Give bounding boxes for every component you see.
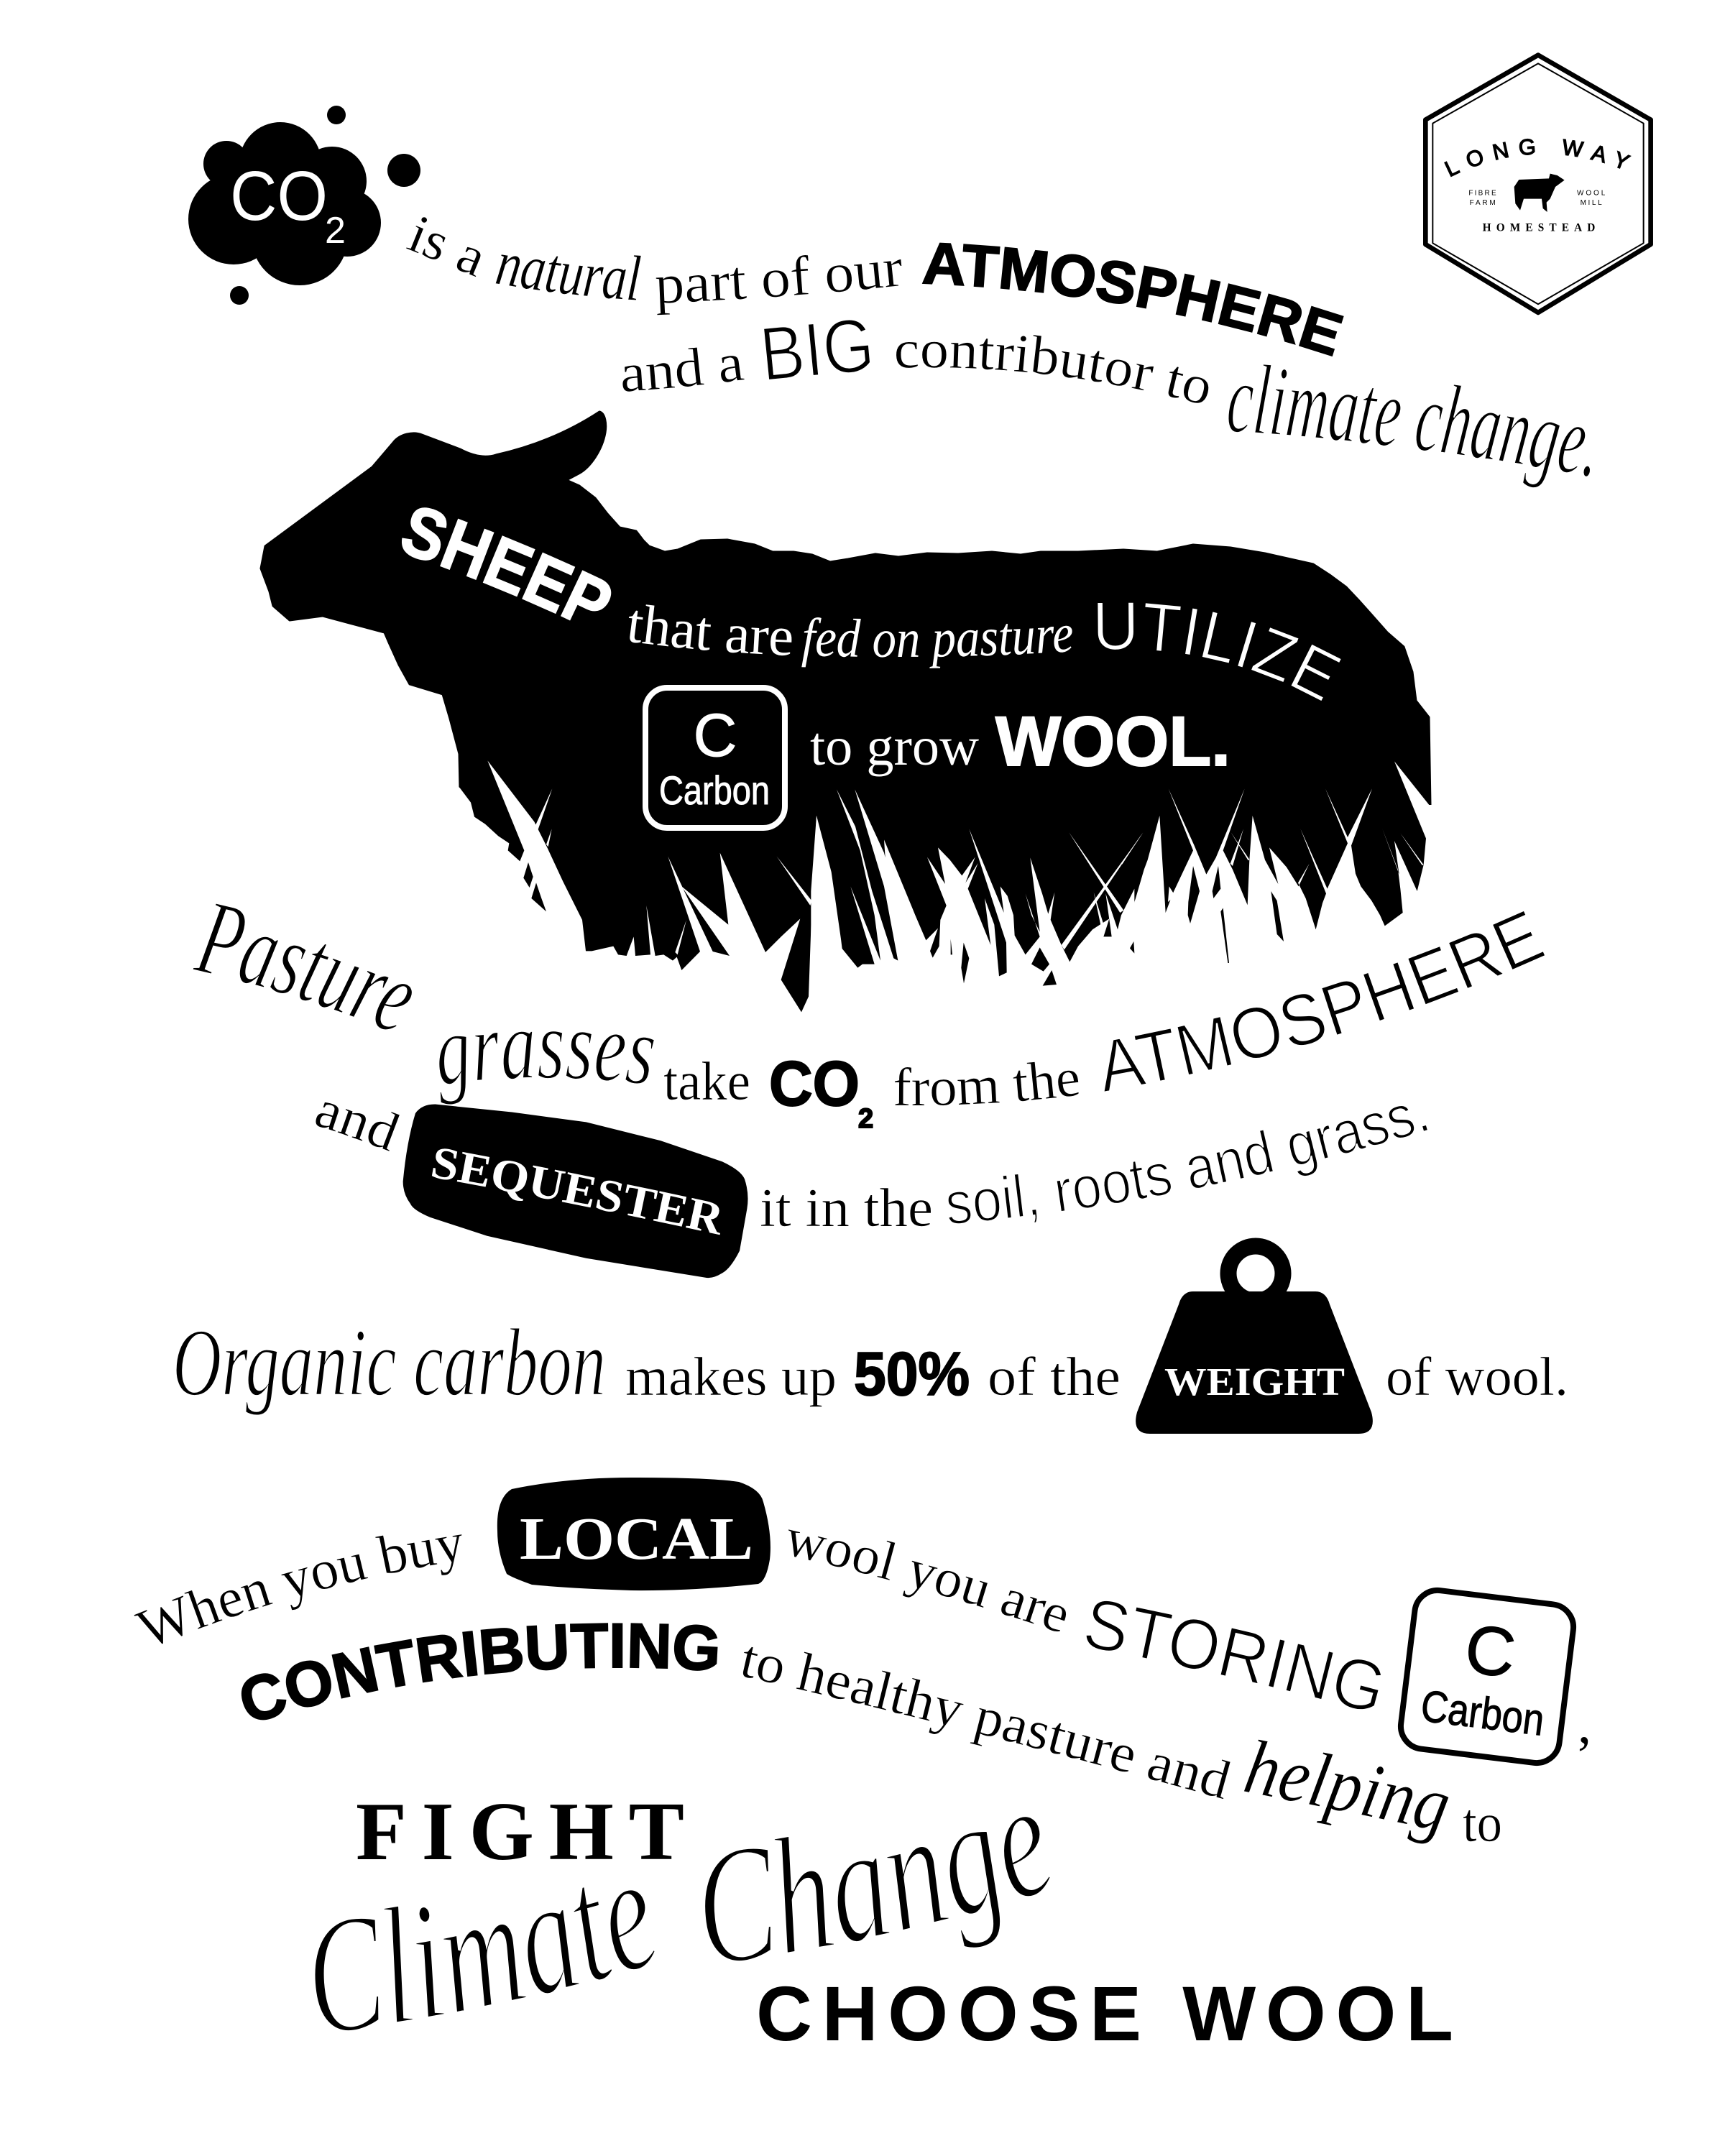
logo: Long Way Homestead hexagon: LONG WAY bbox=[1444, 138, 1632, 177]
line: when you buy local wool you are storing carbon: wool you are bbox=[788, 1529, 1067, 1631]
line: pasture grasses take CO2 from the atmosphere: Pasture bbox=[193, 904, 412, 1029]
heading: fight climate change choose wool bbox=[294, 1743, 1453, 2072]
line: and sequester it in the soil, roots and grass bbox=[308, 1077, 1437, 1278]
line: contributing to healthy pasture and helping to: to healthy pasture and bbox=[743, 1646, 1230, 1800]
badge: local bbox=[497, 1478, 770, 1590]
line: CO2 is a natural part of our atmosphere: natural bbox=[496, 254, 641, 300]
line: and a big contributor to climate change: contributor to bbox=[896, 335, 1209, 403]
icon: CO2 cloud: 2 bbox=[325, 210, 346, 252]
line: CO2 is a natural part of our atmosphere: ATMOSPHERE bbox=[921, 243, 1344, 356]
line: organic carbon makes up 50% of the weight of wool bbox=[172, 1246, 1568, 1434]
icon: weight: WEIGHT bbox=[1164, 1360, 1345, 1404]
line: sheep that are fed on pasture utilize: that are bbox=[628, 604, 792, 655]
grass blades right bbox=[1121, 761, 1432, 1044]
badge: sequester bbox=[403, 1105, 748, 1278]
logo: Long Way Homestead hexagon: HOMESTEAD bbox=[1483, 222, 1595, 234]
icon: CO2 cloud: CO bbox=[230, 157, 328, 235]
logo: Long Way Homestead hexagon: FIBRE bbox=[1468, 190, 1496, 198]
heading: fight climate change choose wool: FIGHT bbox=[356, 1786, 684, 1878]
carbon element box in sheep: Carbon bbox=[659, 768, 770, 813]
heading: fight climate change choose wool: CHOOSE WOOL bbox=[756, 1970, 1453, 2057]
line: pasture grasses take CO2 from the atmosphere: from the bbox=[894, 1061, 1079, 1105]
line: and sequester it in the soil, roots and grass: soil, roots and grass. bbox=[949, 1106, 1427, 1223]
line: organic carbon makes up 50% of the weight of wool: 50% bbox=[854, 1340, 970, 1409]
line: organic carbon makes up 50% of the weight of wool: Organic carbon bbox=[172, 1309, 606, 1416]
line: pasture grasses take CO2 from the atmosphere bbox=[193, 904, 1545, 1134]
line: pasture grasses take CO2 from the atmosphere: ATMOSPHERE bbox=[1104, 911, 1545, 1092]
illustration: sheep silhouette with grass bbox=[261, 412, 1432, 1059]
icon: CO2 cloud bbox=[188, 106, 420, 305]
icon: small sheep bbox=[1514, 174, 1565, 212]
line: sheep that are fed on pasture utilize: SHEEP bbox=[401, 507, 611, 621]
line: sheep that are fed on pasture utilize: fed on pasture bbox=[801, 617, 1072, 668]
line: sheep that are fed on pasture utilize: UTILIZE bbox=[1098, 602, 1341, 701]
line: CO2 is a natural part of our atmosphere: is a bbox=[406, 217, 480, 277]
line: to grow wool: WOOL. bbox=[995, 702, 1230, 780]
line: and a big contributor to climate change: and a bbox=[622, 348, 745, 392]
line: contributing to healthy pasture and helping to: CONTRIBUTING bbox=[242, 1623, 717, 1720]
line: CO2 is a natural part of our atmosphere bbox=[406, 217, 1344, 356]
line: contributing to healthy pasture and helping to bbox=[231, 1610, 1502, 1853]
line: CO2 is a natural part of our atmosphere: part of our bbox=[656, 254, 901, 315]
line: and a big contributor to climate change: BIG bbox=[763, 321, 870, 379]
line: when you buy local wool you are storing carbon bbox=[129, 1478, 1591, 1766]
line: when you buy local wool you are storing carbon: STORING bbox=[1087, 1601, 1381, 1709]
line: organic carbon makes up 50% of the weight of wool: of the bbox=[988, 1347, 1121, 1407]
line: pasture grasses take CO2 from the atmosphere: take bbox=[663, 1051, 750, 1112]
heading: fight climate change choose wool: Climate bbox=[315, 1887, 654, 2031]
line: to grow wool bbox=[810, 702, 1230, 780]
line: organic carbon makes up 50% of the weight of wool: makes up bbox=[625, 1347, 837, 1407]
carbon element box rotated bbox=[1398, 1588, 1576, 1766]
line: organic carbon makes up 50% of the weight of wool: of wool. bbox=[1386, 1347, 1568, 1407]
line: pasture grasses take CO2 from the atmosphere: grasses bbox=[439, 1031, 654, 1104]
line: and sequester it in the soil, roots and grass: it in the bbox=[760, 1178, 933, 1238]
logo: Long Way Homestead hexagon: WOOL bbox=[1577, 190, 1606, 198]
logo: Long Way Homestead hexagon bbox=[1423, 52, 1653, 315]
grass blades left bbox=[458, 760, 829, 1044]
icon: weight bbox=[1136, 1246, 1373, 1434]
line: when you buy local wool you are storing carbon: , bbox=[1578, 1695, 1591, 1755]
line: to grow wool: to grow bbox=[810, 717, 979, 777]
line: when you buy local wool you are storing carbon: When you buy bbox=[134, 1534, 461, 1644]
badge: local: LOCAL bbox=[520, 1506, 753, 1572]
line: and sequester it in the soil, roots and grass: and bbox=[316, 1102, 400, 1151]
carbon element box rotated: C bbox=[1460, 1610, 1519, 1692]
heading: fight climate change choose wool: Change bbox=[705, 1817, 1049, 1961]
line: contributing to healthy pasture and helping to: to bbox=[1463, 1793, 1502, 1853]
line: and a big contributor to climate change bbox=[622, 321, 1590, 487]
carbon element box in sheep: C bbox=[694, 701, 737, 769]
logo: Long Way Homestead hexagon: FARM bbox=[1470, 199, 1496, 207]
grass blades centre bbox=[811, 789, 1144, 1059]
line: contributing to healthy pasture and helping to: helping bbox=[1243, 1739, 1449, 1844]
carbon element box in sheep bbox=[645, 688, 785, 828]
logo: Long Way Homestead hexagon: MILL bbox=[1581, 199, 1602, 207]
line: and a big contributor to climate change: climate change. bbox=[1229, 365, 1590, 487]
line: pasture grasses take CO2 from the atmosphere: CO bbox=[769, 1048, 860, 1119]
carbon element box rotated: Carbon bbox=[1418, 1681, 1547, 1746]
line: sheep that are fed on pasture utilize bbox=[401, 507, 1341, 701]
badge: sequester: SEQUESTER bbox=[431, 1148, 720, 1235]
sheep body bbox=[261, 412, 1430, 1035]
line: pasture grasses take CO2 from the atmosphere: 2 bbox=[858, 1104, 873, 1134]
